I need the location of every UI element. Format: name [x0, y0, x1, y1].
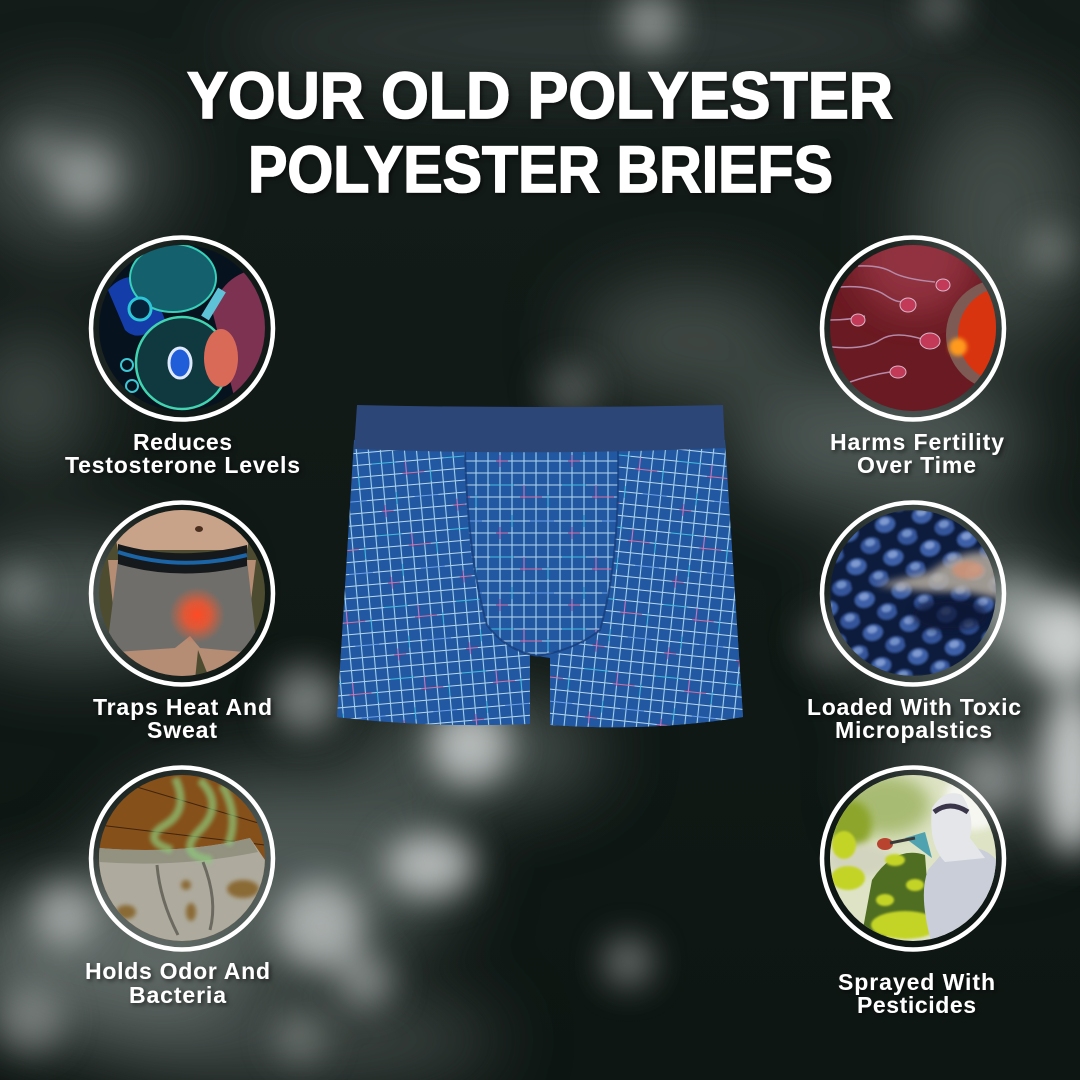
title: YOUR OLD POLYESTER	[187, 58, 893, 132]
feature: harms fertility	[820, 235, 1006, 476]
feature: toxic microplastics	[807, 502, 1021, 743]
label	[830, 429, 1004, 478]
icon: stained underwear on wood floor	[99, 775, 265, 945]
label: Pesticides	[857, 992, 976, 1018]
label: Holds Odor And	[85, 958, 270, 984]
label	[85, 958, 270, 1008]
label: Loaded With Toxic	[807, 694, 1021, 720]
ring	[822, 238, 1004, 420]
right leg panel	[550, 444, 743, 727]
icon: sperm and egg	[830, 245, 996, 411]
label	[807, 694, 1021, 743]
waistband	[354, 405, 725, 452]
title	[187, 58, 893, 206]
label: Testosterone Levels	[65, 452, 300, 478]
ring	[91, 768, 273, 950]
ring	[822, 502, 1004, 684]
label: Sprayed With	[838, 969, 995, 995]
feature: sprayed with pesticides	[822, 768, 1005, 1018]
label: Traps Heat And	[93, 694, 272, 720]
boxer briefs product	[337, 405, 743, 727]
label: Over Time	[857, 452, 976, 478]
label	[65, 429, 300, 478]
ring	[822, 768, 1004, 950]
feature: odor and bacteria	[85, 768, 273, 1008]
label: Micropalstics	[835, 717, 992, 743]
label	[93, 694, 272, 743]
label: Harms Fertility	[830, 429, 1004, 455]
ring	[91, 238, 273, 420]
label: Bacteria	[129, 982, 226, 1008]
icon: worker spraying crops	[830, 775, 996, 941]
icon: cells	[99, 244, 270, 411]
label: Reduces	[133, 429, 232, 455]
left leg panel	[337, 444, 530, 725]
title: POLYESTER BRIEFS	[248, 132, 833, 206]
icon: groin heat	[99, 510, 265, 680]
ring	[91, 502, 273, 684]
silhouette base	[337, 440, 743, 727]
label	[838, 969, 995, 1018]
feature: traps heat	[91, 502, 273, 743]
icon: knit fabric with lint	[830, 510, 1000, 676]
center pouch	[465, 444, 618, 656]
label: Sweat	[147, 717, 217, 743]
seams	[465, 450, 618, 656]
feature: reduces testosterone	[65, 238, 300, 478]
